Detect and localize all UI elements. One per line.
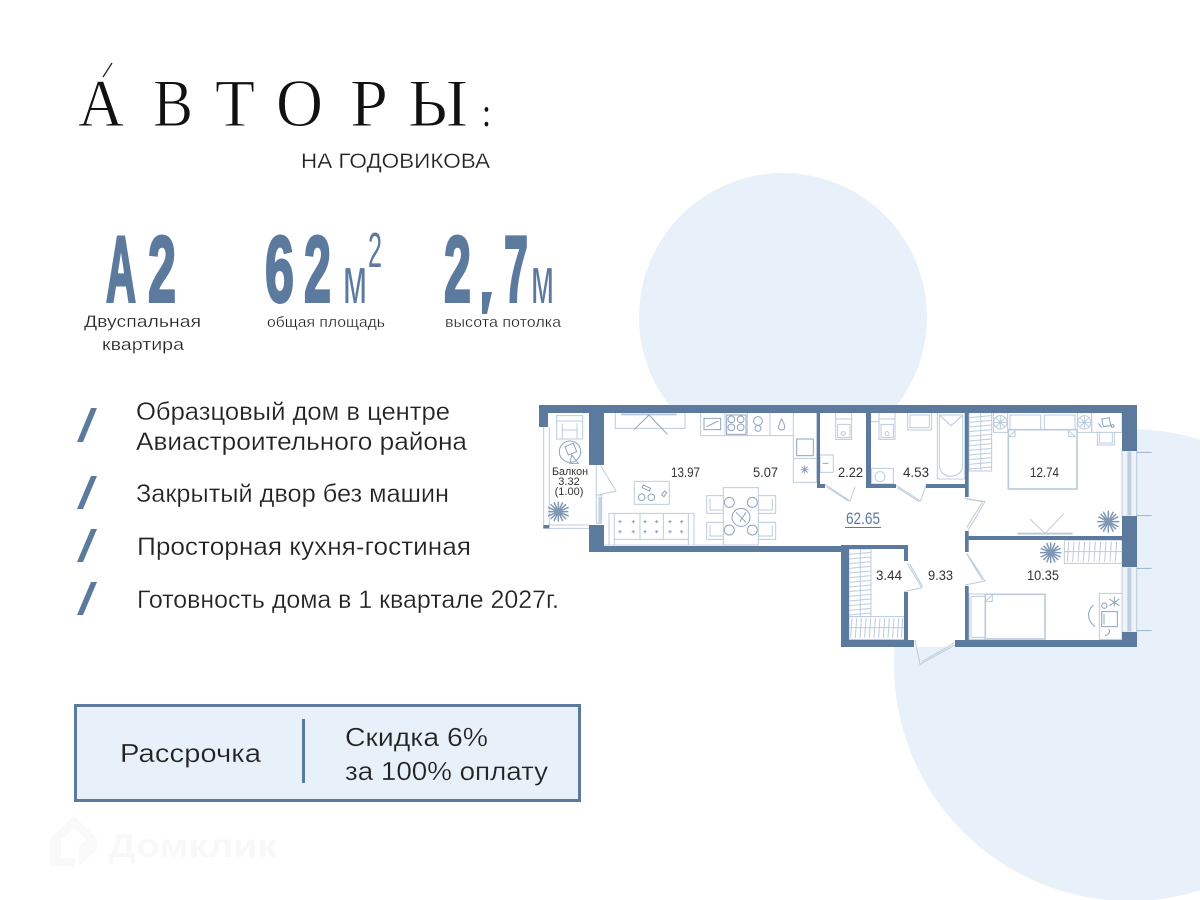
stat: apartment type: А — [106, 216, 136, 322]
stat: apartment type — [84, 216, 201, 354]
bullet 1: Образцовый дом в центре — [136, 398, 450, 426]
room area labels — [671, 464, 1059, 583]
wardrobe: bedroom — [969, 413, 992, 471]
title: А — [78, 65, 124, 141]
total area label: 62.65 — [846, 509, 880, 528]
furniture: balcony and living room — [543, 413, 855, 545]
stat: ceiling height — [444, 216, 562, 331]
coffee table — [634, 481, 669, 504]
title: В — [153, 65, 193, 141]
window: second bedroom — [1122, 567, 1152, 632]
balcony label: (1.00) — [555, 486, 583, 498]
title: : — [482, 90, 491, 135]
door: 2.22 — [825, 484, 855, 501]
room area labels: 13.97 — [671, 464, 700, 480]
stat: ceiling height: высота потолка — [445, 314, 562, 331]
title: Ы — [408, 65, 468, 141]
background circle: lower right — [894, 429, 1200, 900]
bathroom fixtures — [871, 413, 965, 484]
room area labels: 5.07 — [753, 464, 778, 480]
entry door — [915, 640, 955, 664]
stat: total area: м — [343, 243, 367, 317]
room area labels: 2.22 — [838, 464, 863, 480]
bullet 4: Готовность дома в 1 квартале 2027г. — [137, 586, 559, 614]
window strip lower edge — [604, 544, 723, 546]
desk and chair — [1092, 413, 1122, 445]
balcony door — [589, 464, 616, 523]
tv: bedroom — [1017, 531, 1073, 537]
floor plan — [539, 405, 1152, 664]
room area labels: 9.33 — [928, 567, 953, 583]
window: bedroom — [1122, 451, 1152, 517]
background circle: upper — [639, 173, 927, 461]
bullet 3 — [77, 529, 471, 562]
door: closet — [904, 563, 923, 592]
subtitle: НА ГОДОВИКОВА — [301, 150, 490, 173]
bullet 1: Авиастроительного района — [136, 428, 467, 456]
kitchen units — [701, 413, 817, 482]
table settings — [724, 497, 757, 535]
bullet 1 — [77, 398, 467, 456]
stat: apartment type: Двуспальная — [84, 312, 201, 331]
bedside tables — [993, 413, 1092, 432]
doors: hall — [965, 498, 985, 530]
balcony plant — [548, 502, 569, 522]
watermark: Домклик: Домклик — [108, 827, 278, 864]
sofa — [609, 513, 694, 545]
desk: second bedroom — [1099, 593, 1122, 639]
stat: total area: общая площадь — [267, 314, 385, 331]
floor area — [539, 405, 1137, 647]
balcony side table — [559, 441, 581, 463]
walls — [539, 405, 1137, 647]
offer box: Рассрочка — [120, 738, 262, 768]
room area labels: 3.44 — [876, 567, 902, 583]
furniture: bath, bedrooms and hall — [836, 413, 1152, 664]
dining table and chairs — [707, 488, 776, 545]
balcony label: 3.32 — [558, 476, 580, 488]
door: 4.53 — [896, 485, 926, 502]
stat: total area — [265, 216, 385, 331]
closet shelf — [849, 617, 904, 639]
double bed — [1010, 415, 1075, 429]
room area labels: 4.53 — [903, 464, 929, 480]
plant: bedroom — [1097, 511, 1119, 533]
kitchen appliances — [704, 415, 813, 474]
single bed — [969, 594, 985, 639]
stat: apartment type: квартира — [102, 335, 185, 354]
title: О — [276, 65, 323, 141]
stat: ceiling height: м — [531, 243, 554, 317]
room area labels: 12.74 — [1030, 464, 1059, 480]
wardrobe / tv — [615, 413, 685, 428]
stat: total area: 2 — [304, 216, 331, 322]
bullet 2: Закрытый двор без машин — [136, 480, 449, 508]
stat: apartment type: 2 — [148, 216, 176, 322]
stat: total area: 2 — [368, 224, 382, 278]
plant: second bedroom — [1040, 542, 1061, 563]
offer box: Скидка 6% — [345, 722, 488, 752]
wardrobe: second bedroom — [1064, 540, 1122, 563]
room area labels: 10.35 — [1027, 567, 1059, 583]
feature list — [77, 398, 559, 615]
bullet 3: Просторная кухня-гостиная — [137, 533, 471, 561]
sofa tufts — [618, 520, 683, 533]
stat: ceiling height: 2 — [444, 216, 471, 322]
balcony label: Балкон — [552, 466, 588, 478]
toilet / sink room — [820, 455, 833, 472]
balcony edge — [544, 427, 589, 528]
closet wardrobe — [849, 549, 871, 617]
title: Р — [350, 65, 388, 141]
stat: total area: 6 — [265, 216, 294, 322]
offer box: за 100% оплату — [345, 756, 548, 786]
watermark: Домклик — [50, 816, 278, 866]
toilet 2.22 — [836, 413, 852, 439]
balcony label — [552, 466, 588, 498]
title: Т — [215, 65, 255, 141]
stat: ceiling height: 7 — [504, 216, 528, 322]
armchair — [557, 416, 583, 439]
title — [78, 63, 491, 141]
offer box — [76, 706, 580, 800]
